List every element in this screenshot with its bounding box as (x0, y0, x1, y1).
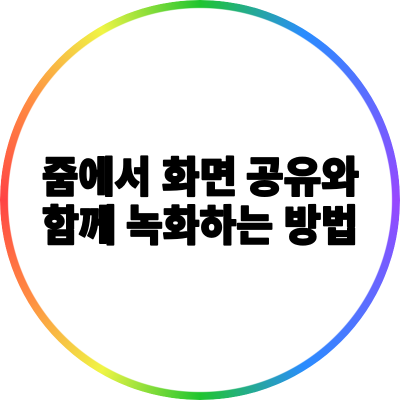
title line 2: 함께 (42, 202, 116, 250)
title line 2: 방법 (284, 202, 358, 250)
title line 1: 줌에서 (42, 154, 151, 201)
title line 1: 공유와 (246, 154, 359, 201)
title line 2 (42, 202, 358, 250)
title line 2: 녹화하는 (126, 202, 273, 250)
title line 1 (42, 154, 359, 201)
title line 1: 화면 (162, 154, 237, 201)
